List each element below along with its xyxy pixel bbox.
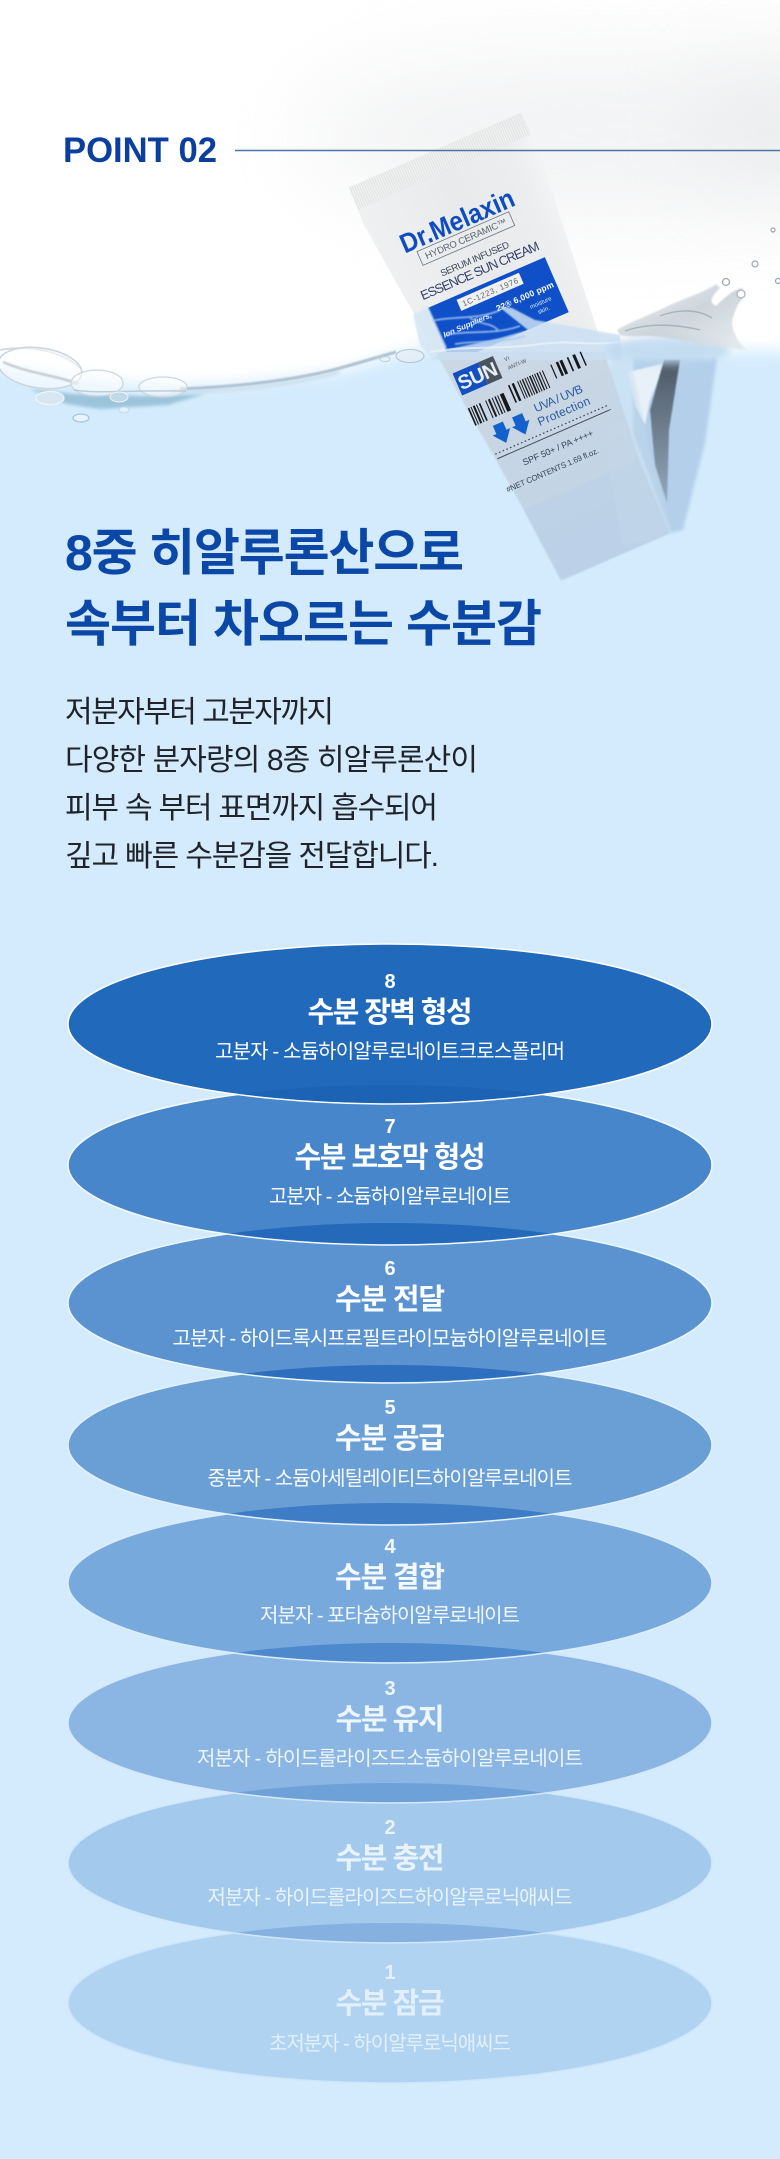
layer 4: 수분 결합 bbox=[335, 1561, 445, 1594]
layer 1: 1 bbox=[384, 1962, 396, 1984]
layer 6 bbox=[68, 1223, 712, 1383]
layer 5: 5 bbox=[384, 1397, 396, 1419]
tube label under water: Protection bbox=[535, 394, 592, 429]
tube label under water: UVA / UVB bbox=[532, 382, 585, 415]
tube label above water: SERUM INFUSED bbox=[439, 240, 511, 279]
layer 6: 수분 전달 bbox=[335, 1283, 445, 1316]
layer 5 bbox=[68, 1365, 712, 1525]
layer 3: 수분 유지 bbox=[336, 1703, 444, 1736]
body text: 깊고 빠른 수분감을 전달합니다. bbox=[65, 840, 439, 873]
tube label under water: SPF 50+ / PA ++++ bbox=[521, 428, 595, 467]
tube label above water: moisture bbox=[529, 296, 553, 311]
layer 2 bbox=[68, 1783, 712, 1943]
tube label under water: ANTI-W bbox=[507, 358, 528, 372]
layer 4 bbox=[68, 1503, 712, 1663]
body text: 다양한 분자량의 8종 히알루론산이 bbox=[65, 744, 478, 777]
layer 6: 고분자 - 하이드록시프로필트라이모늄하이알루로네이트 bbox=[172, 1327, 608, 1350]
water surface with bubbles bbox=[0, 342, 424, 422]
tube label above water bbox=[399, 194, 569, 352]
body text: 피부 속 부터 표면까지 흡수되어 bbox=[65, 792, 438, 825]
layer 5: 중분자 - 소듐아세틸레이티드하이알루로네이트 bbox=[208, 1467, 572, 1490]
heading: 8중 히알루론산으로 bbox=[65, 525, 464, 581]
layer 4: 4 bbox=[384, 1536, 396, 1558]
water splash crown bbox=[617, 278, 747, 350]
layer 7 bbox=[68, 1085, 712, 1245]
tube label under water bbox=[453, 321, 626, 495]
layer 1: 초저분자 - 하이알루로닉애씨드 bbox=[269, 2032, 511, 2055]
layer 7: 7 bbox=[384, 1116, 396, 1138]
layer 8 bbox=[68, 944, 712, 1104]
tube label above water: 1C-1223, 1976 bbox=[461, 276, 520, 308]
layer 1: 수분 잠금 bbox=[336, 1987, 444, 2020]
tube label above water: skin. bbox=[537, 305, 551, 316]
tube body above water bbox=[349, 112, 597, 331]
tube label under water: SUN bbox=[455, 358, 501, 395]
tube label above water: Ion Suppliers, bbox=[442, 311, 493, 340]
body text bbox=[65, 696, 478, 873]
layer 8: 8 bbox=[384, 971, 396, 993]
heading bbox=[65, 525, 542, 652]
tube label above water: 22® 6,000 ppm bbox=[494, 279, 556, 313]
water wave over tube bbox=[413, 306, 622, 360]
layer 4: 저분자 - 포타슘하이알루로네이트 bbox=[260, 1604, 520, 1627]
body text: 저분자부터 고분자까지 bbox=[65, 696, 334, 729]
water band at surface beside tube bbox=[606, 336, 730, 364]
layer 8: 수분 장벽 형성 bbox=[308, 996, 472, 1029]
tube label above water: Dr.Melaxin bbox=[395, 183, 519, 259]
submerged water fold beside tube bbox=[610, 358, 717, 545]
tube label above water: HYDRO CERAMIC™ bbox=[424, 217, 509, 262]
label: POINT 02: POINT 02 bbox=[63, 131, 217, 170]
layer 2: 2 bbox=[384, 1817, 396, 1839]
layer 6: 6 bbox=[384, 1258, 396, 1280]
layer 3 bbox=[68, 1643, 712, 1803]
tube body under water bbox=[437, 352, 670, 580]
layer 5: 수분 공급 bbox=[335, 1423, 445, 1455]
layer 7: 고분자 - 소듐하이알루로네이트 bbox=[269, 1185, 511, 1208]
layer 2: 수분 충전 bbox=[336, 1842, 444, 1875]
layer 1 bbox=[68, 1923, 712, 2083]
layer 3: 저분자 - 하이드롤라이즈드소듐하이알루로네이트 bbox=[197, 1747, 583, 1770]
layer 3: 3 bbox=[384, 1678, 396, 1700]
stacked hyaluronic acid layers bbox=[68, 944, 712, 2083]
layer 7: 수분 보호막 형성 bbox=[294, 1141, 486, 1174]
tube label under water: VI bbox=[504, 356, 511, 363]
water droplets bbox=[752, 228, 780, 284]
tube label under water: #NET CONTENTS 1.69 fl.oz. bbox=[505, 446, 600, 494]
heading: 속부터 차오르는 수분감 bbox=[65, 596, 542, 652]
tube label above water: ESSENCE SUN CREAM bbox=[418, 238, 542, 303]
product tube: Dr.Melaxin sun cream bbox=[348, 112, 780, 596]
layer 2: 저분자 - 하이드롤라이즈드하이알루로닉애씨드 bbox=[208, 1886, 572, 1909]
layer 8: 고분자 - 소듐하이알루로네이트크로스폴리머 bbox=[215, 1040, 565, 1063]
